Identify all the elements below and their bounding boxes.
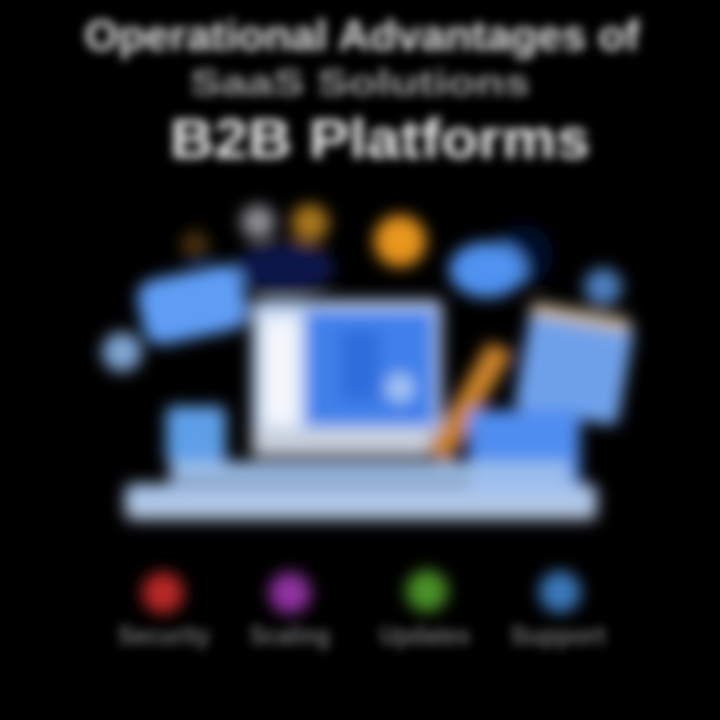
icon: small left circle: [102, 332, 142, 372]
platform: [125, 462, 597, 520]
icon: small blue block: [166, 406, 226, 464]
icon: left speech bubble: [134, 262, 251, 348]
icon: red category: [142, 572, 184, 614]
category labels: Scaling: [250, 620, 330, 650]
central illustration: [102, 204, 636, 614]
icon: back folder: [514, 302, 636, 426]
title: B2B Platforms: [170, 107, 590, 170]
icon: purple category: [269, 572, 311, 614]
icon: dark backdrop shapes: [235, 225, 553, 294]
icon: pencil: [426, 342, 514, 464]
title: [84, 12, 640, 170]
icon: small right circle: [584, 268, 622, 306]
icon: floating coins: [181, 204, 426, 267]
icon: blue category: [539, 571, 581, 613]
category labels: Updates: [380, 620, 470, 650]
category labels: [118, 620, 606, 650]
category labels: Security: [118, 620, 210, 650]
category labels: Support: [510, 620, 606, 650]
icon: monitor: [252, 300, 442, 456]
icon: front folder: [468, 410, 580, 486]
icon: green category: [406, 570, 448, 612]
title: SaaS Solutions: [190, 62, 530, 103]
icon: right speech bubble: [449, 242, 525, 298]
title: Operational Advantages of: [84, 12, 640, 60]
